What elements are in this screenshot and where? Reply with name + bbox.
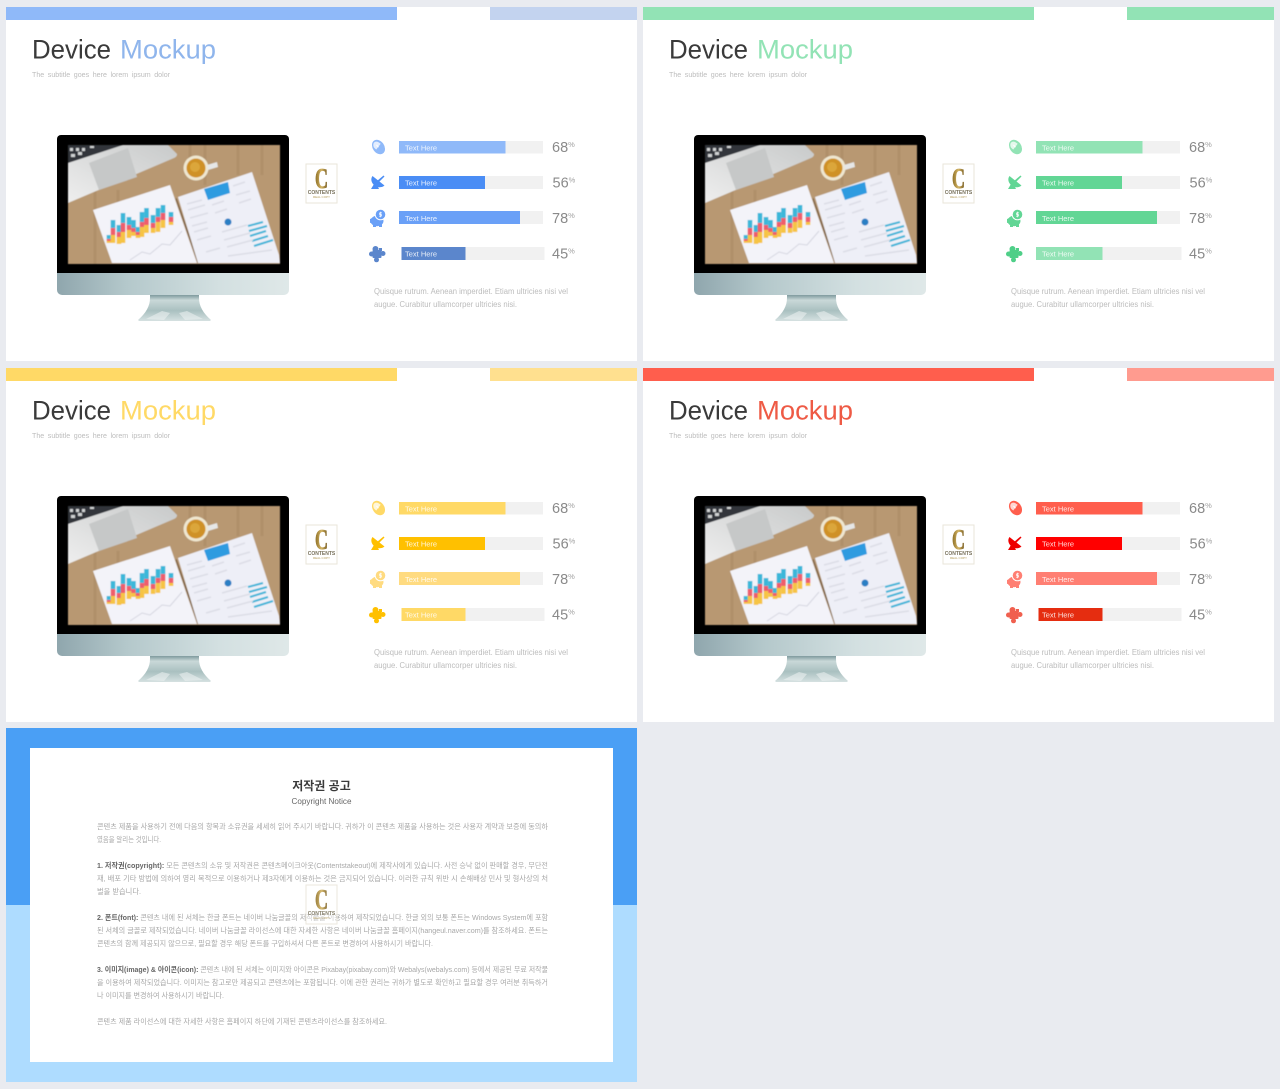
bar: 68%: % (1205, 501, 1212, 510)
subtitle: The subtitle goes here lorem ipsum dolor (669, 431, 808, 440)
bar: 78%: % (1205, 211, 1212, 220)
bar: 68%: Text Here (405, 143, 437, 152)
bar: 68% (1036, 140, 1212, 156)
description text (1011, 648, 1205, 670)
title: Mockup (120, 34, 216, 64)
description text: augue. Curabitur ullamcorper ultricies nisi. (1011, 300, 1154, 309)
subtitle: The subtitle goes here lorem ipsum dolor (669, 70, 808, 79)
bar: 68% (1036, 501, 1212, 517)
copyright body text: 벌을 받습니다. (97, 886, 141, 896)
title: Device (32, 396, 111, 426)
bar: 56%: % (1206, 176, 1213, 184)
copyright body text: 재, 배포 기타 방법에 의하여 영리 목적으로 이용하거나 제3자에게 이용하는 것은 금지되어 있습니다. 이러한 규칙 위반 시 손해배상 민사 및 형사상의 처 (97, 873, 548, 883)
title (669, 396, 853, 426)
bar: 78%: % (568, 572, 575, 581)
icon: mouse (1006, 137, 1025, 157)
title (32, 34, 216, 64)
bar: 78% (1036, 572, 1212, 588)
bar: 45% (1038, 608, 1212, 624)
bar: 68% (399, 501, 575, 517)
watermark logo: REAL COPY (313, 195, 330, 199)
bar: 68%: Text Here (1042, 504, 1074, 513)
bar: 68%: Text Here (405, 504, 437, 513)
watermark logo: REAL COPY (950, 195, 967, 199)
icon: satellite dish (1008, 536, 1022, 550)
bar: 68%: % (568, 140, 575, 149)
bar: 78%: 78 (552, 211, 568, 227)
bar: 78% (399, 572, 575, 588)
bar: 68%: 68 (552, 501, 568, 517)
heading: copyright (292, 778, 352, 806)
title: Mockup (757, 34, 853, 64)
watermark logo (943, 525, 974, 564)
description text (374, 648, 568, 670)
bar: 56% (1036, 536, 1213, 552)
heading: copyright: 저작권 공고 (292, 778, 351, 793)
bar: 45%: % (568, 246, 575, 256)
bar: 68%: 68 (1189, 140, 1205, 156)
bar: 56% (1036, 176, 1213, 192)
copyright body text: 3. 이미지(image) & 아이콘(icon): 콘텐츠 내에 된 서체는 이미지와 아이콘은 Pixabay(pixabay.com)와 Webalys(webalys.com) 등에서 제공된 무료 저작물 (97, 964, 548, 974)
bar: 56%: 56 (552, 536, 569, 552)
bar: 45%: Text Here (405, 610, 437, 620)
bar: 45% (402, 246, 575, 262)
watermark logo: CONTENTS (945, 551, 973, 557)
bar: 45%: 45 (552, 246, 568, 262)
bar: 78%: % (568, 211, 575, 220)
title (32, 396, 216, 426)
bar: 56%: Text Here (405, 178, 437, 187)
panel: red device mockup (643, 368, 1274, 722)
bar: 68%: Text Here (1042, 143, 1074, 152)
subtitle: The subtitle goes here lorem ipsum dolor (32, 431, 171, 440)
icon: mouse (369, 137, 388, 157)
bar: 78%: Text Here (1042, 214, 1074, 223)
bar: 56%: Text Here (1042, 539, 1074, 548)
icon: satellite dish (371, 176, 384, 189)
icon: satellite dish (1008, 176, 1022, 189)
bar: 45%: Text Here (1042, 250, 1074, 258)
bar: 78%: Text Here (405, 214, 437, 223)
bar: 56%: Text Here (1042, 178, 1074, 187)
description text (374, 287, 568, 309)
bar: 78%: 78 (552, 572, 568, 588)
heading: copyright: Copyright Notice (292, 796, 352, 806)
watermark logo: C (315, 885, 328, 916)
description text: Quisque rutrum. Aenean imperdiet. Etiam ultricies nisi vel (1011, 287, 1205, 296)
title (669, 34, 853, 64)
icon: satellite dish (371, 536, 384, 550)
device monitor (57, 135, 289, 321)
device monitor (694, 135, 926, 321)
bar: 78% (399, 211, 575, 227)
bar: 45%: 45 (552, 608, 568, 624)
watermark logo (306, 525, 337, 564)
title: Device (669, 34, 748, 64)
watermark logo: REAL COPY (313, 916, 330, 920)
icon: piggy bank (1007, 570, 1023, 588)
subtitle: The subtitle goes here lorem ipsum dolor (32, 70, 171, 79)
copyright body text (97, 821, 548, 1026)
description text: Quisque rutrum. Aenean imperdiet. Etiam ultricies nisi vel (374, 287, 568, 296)
bar: 68%: % (1205, 140, 1212, 149)
bar: 68%: 68 (552, 140, 568, 156)
bar: 56%: % (569, 536, 576, 546)
title: Device (669, 396, 748, 426)
title: Mockup (120, 396, 216, 426)
title: Mockup (757, 396, 853, 426)
bar: 45%: % (568, 608, 575, 616)
bar: 56%: Text Here (405, 539, 437, 548)
description text (1011, 287, 1205, 309)
icon: mouse (369, 498, 388, 518)
copyright body text: 콘텐츠 제품 라이선스에 대한 자세한 사항은 홈페이지 하단에 기재된 콘텐츠라이선스를 참조하세요. (97, 1016, 387, 1026)
bar: 45% (1036, 246, 1212, 262)
icon: piggy bank (370, 209, 386, 227)
watermark logo: C (952, 525, 965, 556)
copyright body text: 2. 폰트(font): 콘텐츠 내에 된 서체는 한글 폰트는 네이버 나눔글꼴의 저작물을 이용하여 제작되었습니다. 한글 외의 보통 폰트는 Windows System에 포함 (97, 912, 548, 922)
watermark logo: C (315, 164, 328, 195)
bar: 78% (1036, 211, 1212, 227)
device monitor (694, 496, 926, 682)
bar: 78%: Text Here (1042, 575, 1074, 584)
bar: 45%: % (1205, 608, 1212, 616)
watermark logo (943, 164, 974, 203)
bar: 56%: % (569, 176, 576, 184)
icon: piggy bank (370, 570, 386, 588)
bar: 56%: 56 (1190, 536, 1206, 552)
watermark logo: CONTENTS (308, 911, 336, 917)
icon: puzzle (369, 246, 386, 262)
bar: 45%: Text Here (1042, 610, 1074, 620)
bar: 56%: % (1206, 536, 1213, 546)
watermark logo: C (952, 164, 965, 195)
watermark logo (306, 164, 337, 203)
icon: puzzle (1006, 607, 1022, 623)
bar: 45%: 45 (1189, 246, 1205, 262)
bar: 78%: Text Here (405, 575, 437, 584)
panel: copyright notice (6, 728, 637, 1082)
icon: mouse (1006, 498, 1025, 518)
description text: augue. Curabitur ullamcorper ultricies nisi. (1011, 661, 1154, 670)
bar: 56% (399, 176, 576, 192)
bar: 45%: Text Here (405, 250, 437, 258)
watermark logo: REAL COPY (950, 556, 967, 560)
description text: augue. Curabitur ullamcorper ultricies nisi. (374, 300, 517, 309)
bar: 45%: % (1205, 246, 1212, 256)
icon: piggy bank (1007, 209, 1023, 227)
title: Device (32, 34, 111, 64)
bar: 56% (399, 536, 576, 552)
panel: yellow device mockup (6, 368, 637, 722)
copyright body text: 였음을 알리는 것입니다. (97, 834, 161, 844)
description text: Quisque rutrum. Aenean imperdiet. Etiam ultricies nisi vel (374, 648, 568, 657)
bar: 68%: 68 (1189, 501, 1205, 517)
description text: augue. Curabitur ullamcorper ultricies nisi. (374, 661, 517, 670)
icon: puzzle (1006, 246, 1022, 262)
bar: 78%: 78 (1189, 572, 1205, 588)
bar: 56%: 56 (552, 176, 569, 192)
watermark logo (306, 885, 337, 924)
bar: 45%: 45 (1189, 608, 1205, 624)
watermark logo: REAL COPY (313, 556, 330, 560)
copyright body text: 나 이미지를 변경하여 사용하시기 바랍니다. (97, 990, 224, 1000)
watermark logo: CONTENTS (308, 190, 336, 196)
copyright body text: 콘텐츠 제품을 사용하기 전에 다음의 항목과 소유권을 세세히 읽어 주시기 바랍니다. 귀하가 이 콘텐츠 제품을 사용하는 것은 사용자 계약과 보증에 동의하 (97, 821, 548, 831)
panel: blue device mockup (6, 7, 637, 361)
device monitor (57, 496, 289, 682)
bar: 78%: 78 (1189, 211, 1205, 227)
panel: green device mockup (643, 7, 1274, 361)
copyright body text: 1. 저작권(copyright): 모든 콘텐츠의 소유 및 저작권은 콘텐츠메이크아웃(Contentstakeout)에 제작사에게 있습니다. 사전 승낙 없이 판매할 경우, 무단전 (97, 860, 548, 870)
bar: 56%: 56 (1190, 176, 1206, 192)
watermark logo: C (315, 525, 328, 556)
copyright body text: 을 이용하여 제작되었습니다. 이미지는 참고로만 제공되고 콘텐츠에는 포함됩니다. 이에 관한 권리는 귀하가 별도로 확인하고 필요할 경우 여러분 취득하거 (97, 977, 548, 987)
icon: puzzle (369, 607, 386, 623)
bar: 78%: % (1205, 572, 1212, 581)
bar: 68%: % (568, 501, 575, 510)
copyright body text: 된 서체의 글꼴로 제작되었습니다. 네이버 나눔글꼴 라이선스에 대한 자세한 사항은 네이버 나눔글꼴 홈페이지(hangeul.naver.com)를 참조하세요. 폰트는 (97, 925, 548, 935)
bar: 68% (399, 140, 575, 156)
bar: 45% (402, 608, 575, 624)
description text: Quisque rutrum. Aenean imperdiet. Etiam ultricies nisi vel (1011, 648, 1205, 657)
watermark logo: CONTENTS (945, 190, 973, 196)
copyright body text: 콘텐츠의 함께 제공되지 않으므로, 필요할 경우 해당 폰트를 구입하셔서 다른 폰트로 변경하여 사용하시기 바랍니다. (97, 938, 433, 948)
watermark logo: CONTENTS (308, 551, 336, 557)
